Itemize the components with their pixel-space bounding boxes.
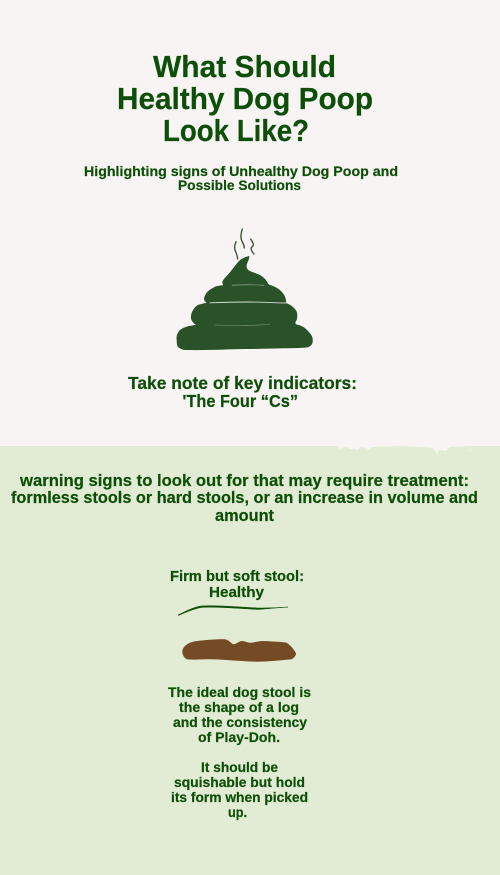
icon: steaming poop pile <box>176 229 313 350</box>
description text: The ideal dog stool is <box>168 685 311 700</box>
description text <box>168 685 311 820</box>
panel: top background <box>0 0 500 447</box>
warning signs text <box>11 472 478 525</box>
layer gaps <box>210 285 286 325</box>
subtitle: Possible Solutions <box>178 177 301 193</box>
key indicators heading: 'The Four “Cs” <box>182 391 298 411</box>
pile silhouette <box>176 256 313 350</box>
key indicators heading: Take note of key indicators: <box>128 373 357 393</box>
subtitle: Highlighting signs of Unhealthy Dog Poop and <box>84 163 398 179</box>
title <box>117 50 373 148</box>
subtitle <box>84 163 398 193</box>
underline stroke <box>178 606 288 616</box>
panel: bottom green background <box>0 446 500 875</box>
description text: and the consistency <box>173 715 307 730</box>
description text: up. <box>228 805 247 820</box>
icon: brown healthy stool <box>182 639 296 662</box>
warning signs text: warning signs to look out for that may require treatment: <box>19 472 469 490</box>
title: Healthy Dog Poop <box>117 82 373 116</box>
title: What Should <box>153 50 336 84</box>
description text: the shape of a log <box>179 700 299 715</box>
healthy stool heading <box>170 569 304 601</box>
description text: It should be <box>201 760 278 775</box>
healthy stool heading: Firm but soft stool: <box>170 569 304 585</box>
warning signs text: formless stools or hard stools, or an increase in volume and <box>11 489 478 507</box>
warning signs text: amount <box>215 507 274 525</box>
title: Look Like? <box>163 114 309 148</box>
description text: squishable but hold <box>174 775 305 790</box>
healthy stool heading: Healthy <box>209 585 264 601</box>
steam wisps <box>235 229 254 259</box>
description text: of Play-Doh. <box>198 730 280 745</box>
key indicators heading <box>128 373 357 411</box>
description text: its form when picked <box>171 790 308 805</box>
